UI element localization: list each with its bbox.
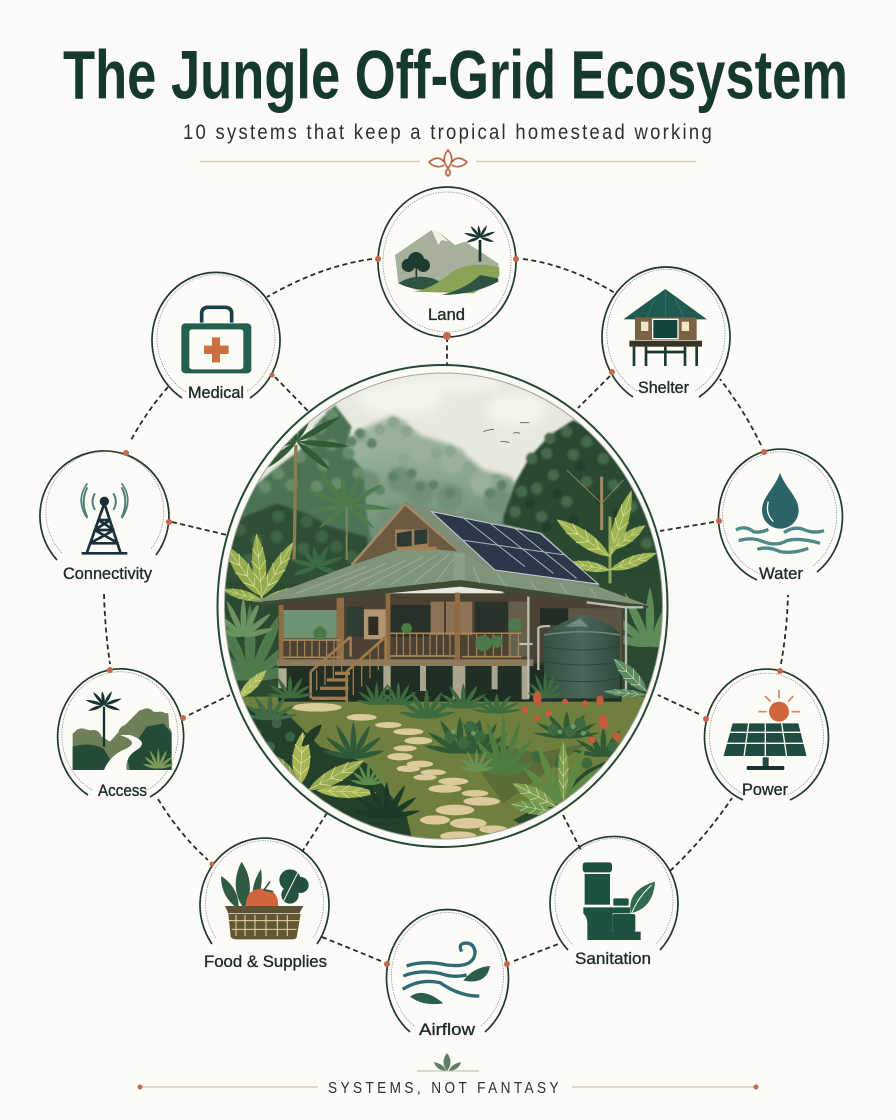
node: Sanitation: Sanitation: [575, 949, 651, 968]
connector dots: [107, 256, 783, 967]
tank-side leaf: [604, 658, 647, 698]
node: Water: Water: [759, 564, 803, 583]
node: Access: [58, 669, 184, 800]
under house: [278, 663, 622, 702]
icon: stilt house: [623, 289, 707, 366]
shrubs in front of house: [266, 672, 563, 720]
node: Connectivity: [40, 451, 169, 583]
node: Power: [704, 669, 828, 800]
lower jungle fill behind house: [228, 611, 654, 697]
misty far forest: [345, 413, 516, 558]
left jungle canopy: [226, 404, 372, 584]
footer tagline: SYSTEMS, NOT FANTASY: [328, 1080, 562, 1097]
central hub illustration: jungle homestead: [216, 364, 668, 848]
foreground right plants: [511, 740, 606, 824]
icon: toilet with leaf: [583, 862, 655, 940]
icon: first aid kit: [181, 307, 251, 373]
banana plant left: [225, 534, 294, 602]
sky: [258, 374, 576, 594]
icon: sun and solar panel: [723, 690, 807, 770]
banana plant right: [552, 488, 659, 583]
icon: water drop and waves: [736, 473, 824, 552]
house posts and railings: [279, 593, 460, 660]
plants on porch: [313, 618, 522, 651]
upper roof: [405, 502, 600, 587]
connectors: dashed links between systems and hub: [104, 259, 788, 961]
icon: wind and leaves: [403, 943, 490, 1004]
birds: [483, 423, 529, 443]
main roof: [252, 547, 648, 605]
node: Connectivity: Connectivity: [63, 564, 152, 583]
node: Food & Supplies: [200, 838, 329, 971]
footer rules: [138, 1084, 758, 1090]
rain tank: [544, 615, 620, 698]
node: Food & Supplies: Food & Supplies: [204, 952, 327, 971]
subtitle: 10 systems that keep a tropical homestead working: [183, 121, 714, 144]
ground: [242, 696, 645, 838]
node: Sanitation: [550, 836, 678, 968]
foreground left plants: [240, 670, 420, 836]
icon: radio tower: [81, 483, 128, 553]
node: Airflow: Airflow: [419, 1020, 476, 1039]
node: Medical: [152, 272, 280, 402]
right jungle canopy: [503, 420, 670, 670]
flowers: [521, 691, 621, 744]
stairs: [311, 637, 386, 702]
icon: land with mountain and palm: [395, 225, 499, 295]
node: Land: [378, 187, 516, 337]
gable: [352, 502, 460, 565]
node: Access: Access: [98, 781, 147, 800]
palms: [294, 445, 296, 560]
node: Power: Power: [742, 780, 788, 799]
icon: palm and winding path: [73, 690, 174, 770]
node: Airflow: [386, 909, 508, 1039]
node: Land: Land: [428, 305, 465, 324]
node: Shelter: Shelter: [638, 378, 689, 397]
footer sprig: [417, 1053, 479, 1071]
house wall: [278, 593, 623, 662]
solar panels: [432, 512, 598, 584]
stone path: [292, 703, 507, 841]
pipes: [519, 597, 643, 698]
header divider with ornament: [200, 150, 696, 176]
icon: vegetable basket: [217, 861, 309, 939]
node: Medical: Medical: [188, 383, 244, 402]
node: Shelter: [602, 267, 730, 397]
node: Water: [718, 449, 842, 583]
